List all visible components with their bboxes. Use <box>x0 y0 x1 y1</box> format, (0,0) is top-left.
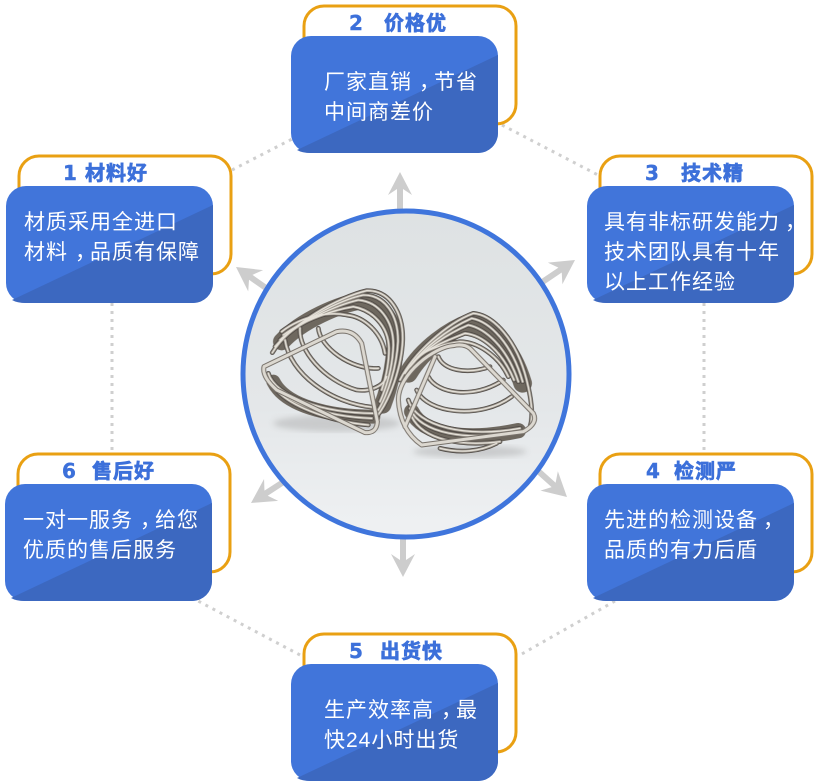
heading: 技术精 <box>681 157 744 186</box>
heading <box>349 635 443 664</box>
text: 快24小时出货 <box>324 729 459 752</box>
text: 一对一服务 ，给您 <box>23 509 199 532</box>
text: 具有非标研发能力， <box>604 211 807 234</box>
panel: card 3 技术精 <box>587 156 812 303</box>
text: 厂家直销 ，节省 <box>324 71 478 94</box>
arrow: to card 3 <box>535 249 582 293</box>
heading: 材料好 <box>85 157 148 186</box>
text: 优质的售后服务 <box>23 539 177 562</box>
panel: card 4 检测严 <box>587 454 812 601</box>
heading <box>646 455 737 484</box>
heading: 检测严 <box>674 455 737 484</box>
central photo circle with springs <box>243 211 569 537</box>
heading <box>349 7 447 36</box>
heading: 1 <box>63 161 77 185</box>
heading: 4 <box>646 459 660 483</box>
heading: 6 <box>62 459 76 483</box>
text: 生产效率高 ，最 <box>324 699 478 722</box>
arrow: to card 6 <box>244 470 292 514</box>
heading <box>645 157 744 186</box>
arrow: up to card 2 <box>388 172 412 210</box>
arrow: down to card 5 <box>391 537 415 577</box>
heading: 5 <box>349 639 363 663</box>
heading: 售后好 <box>92 455 155 484</box>
heading: 价格优 <box>384 7 447 36</box>
panel: card 2 价格优 <box>291 6 516 153</box>
arrow: to card 1 <box>229 256 276 301</box>
panel: card 6 售后好 <box>5 454 230 601</box>
connector: dotted hexagon lines <box>112 125 704 655</box>
heading <box>62 455 155 484</box>
text: 以上工作经验 <box>604 271 736 294</box>
text: 品质的有力后盾 <box>604 539 758 562</box>
heading: 3 <box>645 161 659 185</box>
text: 中间商差价 <box>324 101 434 124</box>
text: 材料 ，品质有保障 <box>24 241 200 264</box>
text: 先进的检测设备， <box>604 509 785 532</box>
panel: card 1 材料好 <box>6 156 231 303</box>
heading: 出货快 <box>380 635 443 664</box>
arrow: to card 4 <box>529 461 576 507</box>
heading: 2 <box>349 11 363 35</box>
text: 技术团队具有十年 <box>604 241 780 264</box>
text: 材质采用全进口 <box>24 211 178 234</box>
panel: card 5 出货快 <box>291 634 516 781</box>
